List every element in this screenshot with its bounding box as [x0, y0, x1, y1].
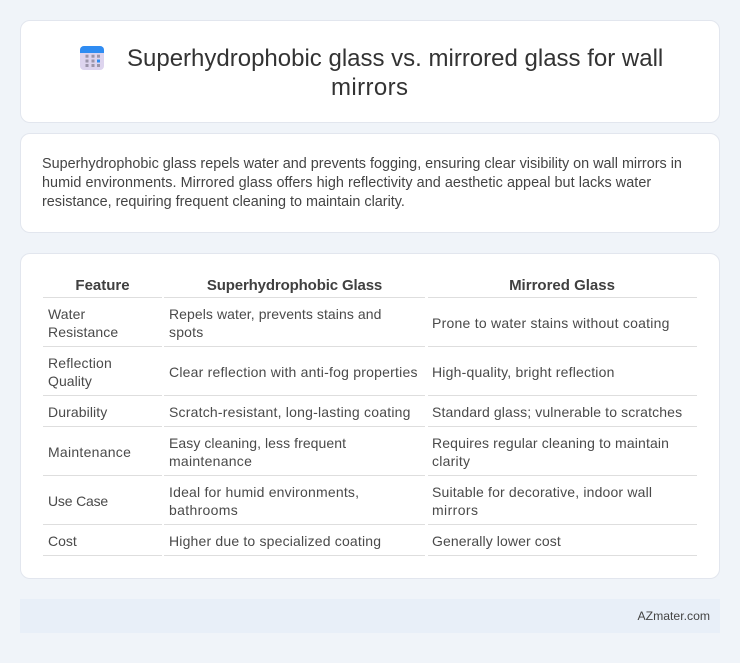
row: maintenance: Easy cleaning, less frequent — [169, 435, 346, 451]
row: use case: Ideal for humid environments, — [169, 484, 359, 500]
title: mirrors — [331, 74, 408, 101]
summary text: resistance, requiring frequent cleaning to maintain clarity. — [42, 194, 405, 210]
row: use case: bathrooms — [169, 502, 238, 518]
table header: Feature — [75, 277, 130, 294]
row: reflection quality: Clear reflection with anti-fog properties — [169, 364, 418, 380]
row: water resistance: Prone to water stains without coating — [432, 315, 670, 331]
row: maintenance — [48, 435, 669, 469]
row: cost: Generally lower cost — [432, 533, 561, 549]
row: water resistance: spots — [169, 324, 203, 340]
panel: title card — [20, 20, 720, 123]
footer credit: AZmater.com — [638, 609, 710, 623]
row: reflection quality: Quality — [48, 373, 92, 389]
row: durability: Durability — [48, 404, 107, 420]
row: durability: Scratch-resistant, long-lasting coating — [169, 404, 411, 420]
table header — [75, 277, 615, 294]
summary text: Superhydrophobic glass repels water and prevents fogging, ensuring clear visibility on wall mirrors in — [42, 156, 682, 172]
icon: calendar — [80, 46, 104, 70]
panel: summary card — [20, 133, 720, 233]
row: water resistance: Resistance — [48, 324, 118, 340]
table header: Mirrored Glass — [509, 277, 615, 294]
row: maintenance: clarity — [432, 453, 470, 469]
footer bar — [20, 599, 720, 633]
row: cost — [48, 533, 561, 549]
row: use case: Use Case — [48, 493, 108, 509]
panel: comparison table — [20, 253, 720, 579]
row: reflection quality: High-quality, bright reflection — [432, 364, 615, 380]
row: reflection quality: Reflection — [48, 355, 112, 371]
row: use case: mirrors — [432, 502, 478, 518]
row: durability — [48, 404, 682, 420]
row: durability: Standard glass; vulnerable to scratches — [432, 404, 682, 420]
row: maintenance: Requires regular cleaning to maintain — [432, 435, 669, 451]
row: cost: Cost — [48, 533, 77, 549]
row: water resistance: Repels water, prevents stains and — [169, 306, 381, 322]
title — [127, 45, 663, 101]
table header: Superhydrophobic Glass — [207, 277, 382, 294]
row: cost: Higher due to specialized coating — [169, 533, 381, 549]
row: maintenance: Maintenance — [48, 444, 131, 460]
row: water resistance — [48, 306, 670, 340]
row: reflection quality — [48, 355, 615, 389]
row: use case: Suitable for decorative, indoor wall — [432, 484, 652, 500]
row: maintenance: maintenance — [169, 453, 252, 469]
row: use case — [48, 484, 652, 518]
summary text — [42, 156, 682, 210]
row: water resistance: Water — [48, 306, 85, 322]
summary text: humid environments. Mirrored glass offers high reflectivity and aesthetic appeal but lacks water — [42, 175, 651, 191]
title: Superhydrophobic glass vs. mirrored glass for wall — [127, 45, 663, 72]
